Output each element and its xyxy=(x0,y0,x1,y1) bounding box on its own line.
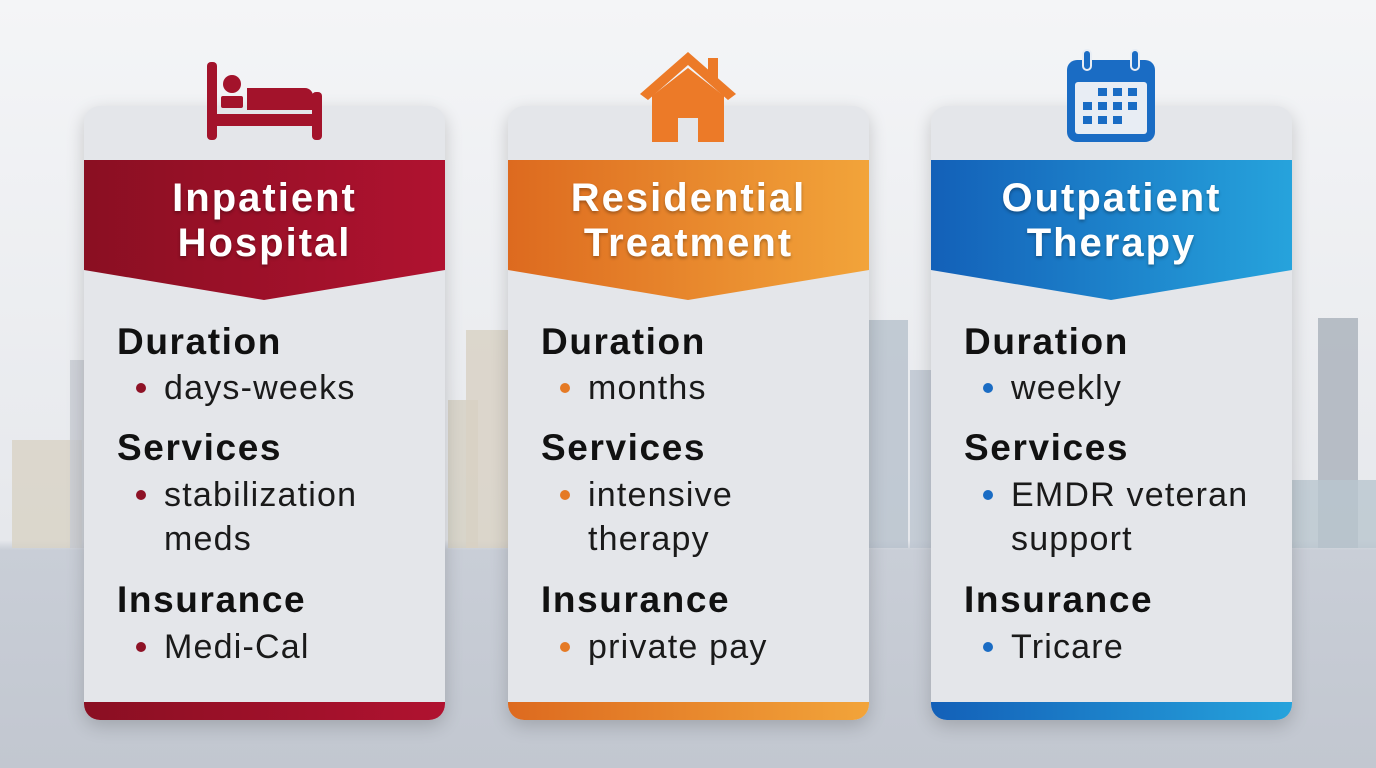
title: Hospital xyxy=(178,221,351,265)
panel: inpatient hospital: stabilization xyxy=(164,476,357,514)
title xyxy=(571,176,806,265)
title: Outpatient xyxy=(1002,176,1221,220)
icon: calendar xyxy=(1067,49,1155,142)
panel: inpatient hospital: days-weeks xyxy=(164,369,356,407)
services: Services xyxy=(964,427,1129,468)
title: Inpatient xyxy=(172,176,357,220)
panel: residential treatment: therapy xyxy=(588,520,710,558)
panel: residential treatment: private pay xyxy=(588,628,768,666)
panel: outpatient therapy: EMDR veteran xyxy=(1011,476,1248,514)
title: Therapy xyxy=(1027,221,1196,265)
insurance: Insurance xyxy=(117,579,306,620)
panel: outpatient therapy xyxy=(931,106,1292,720)
duration: Duration xyxy=(964,321,1129,362)
panel: outpatient therapy: weekly xyxy=(1011,369,1122,407)
header band xyxy=(84,160,445,300)
title: Treatment xyxy=(584,221,793,265)
panel: inpatient hospital: Medi-Cal xyxy=(164,628,310,666)
title: Residential xyxy=(571,176,806,220)
icon: bed xyxy=(207,62,322,140)
insurance: Insurance xyxy=(964,579,1153,620)
panel: outpatient therapy: support xyxy=(1011,520,1133,558)
panel: residential treatment: intensive xyxy=(588,476,733,514)
header band xyxy=(508,160,869,300)
panel: inpatient hospital xyxy=(84,106,445,720)
title xyxy=(1002,176,1221,268)
icon: house xyxy=(640,52,736,142)
duration: Duration xyxy=(117,321,282,362)
panel: outpatient therapy: Tricare xyxy=(1011,628,1124,666)
skyline background xyxy=(12,318,1376,548)
insurance: Insurance xyxy=(541,579,730,620)
services: Services xyxy=(117,427,282,468)
duration: Duration xyxy=(541,321,706,362)
panel: residential treatment xyxy=(508,106,869,720)
header band xyxy=(931,160,1292,300)
title xyxy=(172,176,357,268)
panel: residential treatment: months xyxy=(588,369,707,407)
panel: inpatient hospital: meds xyxy=(164,520,252,558)
services: Services xyxy=(541,427,706,468)
